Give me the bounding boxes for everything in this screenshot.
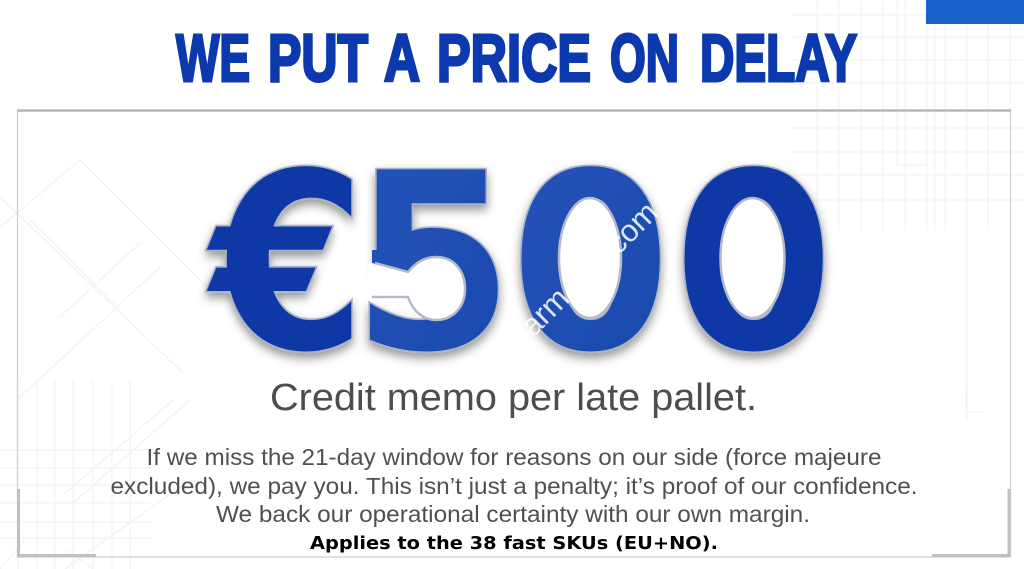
title: WE (176, 21, 250, 96)
big figure: €500 (206, 121, 834, 407)
title: ON (610, 21, 679, 96)
watermark: arm (513, 280, 576, 343)
body paragraph: If we miss the 21-day window for reasons on our side (force majeure (146, 444, 882, 470)
subheading: Credit memo per late pallet. (270, 377, 757, 419)
title: DELAY (700, 21, 857, 96)
euro sign: € (206, 122, 366, 407)
watermark (513, 195, 665, 343)
digit 5: 5 (352, 121, 514, 406)
body paragraph: We back our operational certainty with our own margin. (216, 501, 810, 527)
title: A (384, 21, 420, 96)
body paragraph (110, 444, 917, 527)
corner tab (926, 0, 1024, 24)
digit 0: 0 (510, 121, 671, 407)
title: PRICE (437, 21, 591, 96)
panel frame (17, 110, 1011, 557)
body paragraph: excluded), we pay you. This isn’t just a penalty; it’s proof of our confidence. (110, 473, 917, 499)
watermark: com (599, 195, 665, 261)
note: Applies to the 38 fast SKUs (EU+NO). (310, 533, 718, 554)
title: PUT (268, 21, 368, 96)
digit counters (368, 198, 784, 320)
digit 0: 0 (674, 121, 834, 407)
title (176, 21, 857, 96)
